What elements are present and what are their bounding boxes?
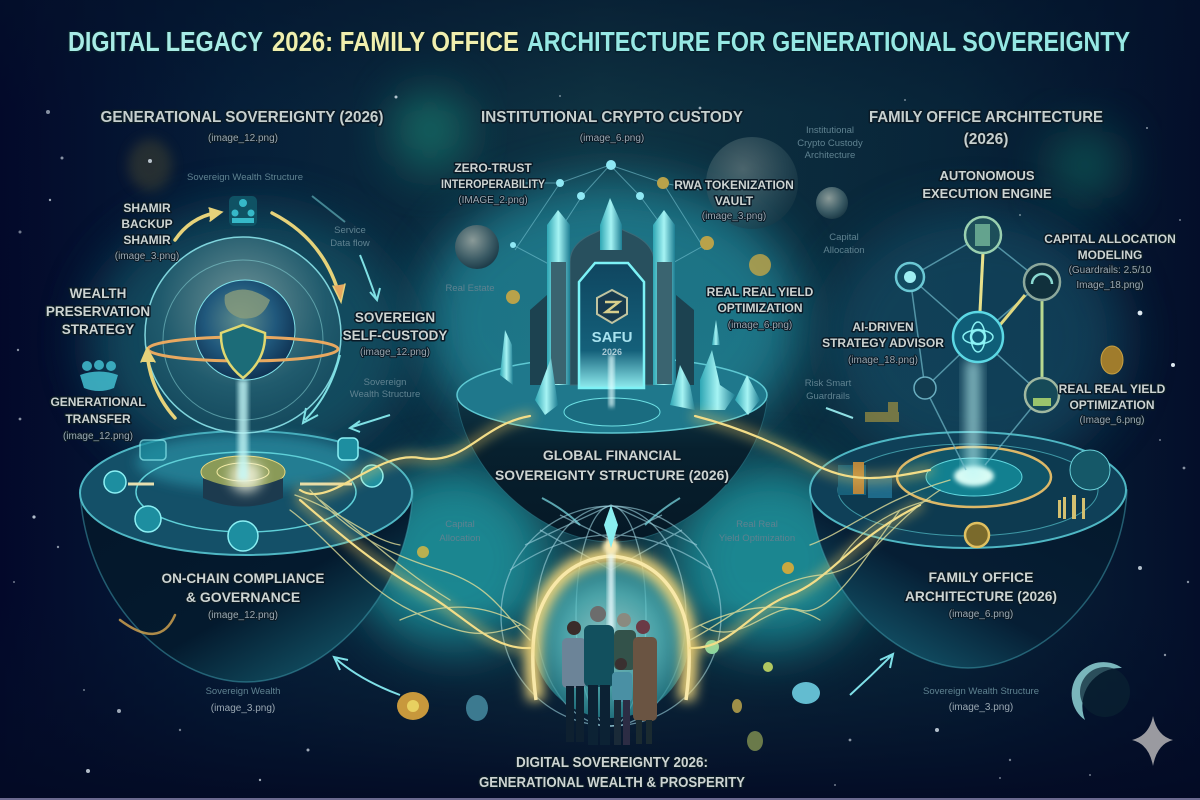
panel text: generational sovereignty: (image_3.png) xyxy=(115,251,179,262)
panel text: generational sovereignty: (image_12.png) xyxy=(63,431,133,442)
panel text: family office architecture: REAL REAL YIELD xyxy=(1059,382,1166,396)
orange orbit ring xyxy=(148,337,338,361)
panel text: family office architecture: MODELING xyxy=(1078,248,1142,262)
panel text: family office architecture: STRATEGY ADVISOR xyxy=(822,336,944,350)
panel text: family office architecture: (Image_6.png) xyxy=(1079,415,1145,426)
panel text: bowl captions: (image_6.png) xyxy=(949,609,1013,620)
panel text: generational sovereignty: Service xyxy=(334,225,366,236)
person: tall man xyxy=(584,606,614,745)
center bowl xyxy=(457,400,767,542)
floating flow arrows xyxy=(334,498,893,695)
disc charts and coin xyxy=(838,450,1110,547)
icon: gold yield badge xyxy=(1101,346,1123,374)
panel text: bowl captions: (image_12.png) xyxy=(208,610,278,621)
panel text: generational sovereignty: (image_12.png) xyxy=(208,133,278,144)
panel text: generational sovereignty: WEALTH xyxy=(70,286,126,301)
panel text: bowl captions xyxy=(162,569,1057,714)
panel text: institutional crypto custody: Institutional xyxy=(806,125,854,136)
icon: generational transfer people xyxy=(80,360,118,391)
panel text: family office architecture xyxy=(805,109,1176,426)
panel text: institutional crypto custody: Yield Optimization xyxy=(719,533,795,544)
right bowl xyxy=(810,490,1127,668)
panel text: generational sovereignty: SOVEREIGN xyxy=(355,310,435,325)
panel text: generational sovereignty xyxy=(46,109,447,442)
panel text: generational sovereignty: Sovereign xyxy=(364,377,406,388)
panel text: bowl captions: & GOVERNANCE xyxy=(186,589,300,605)
panel text: generational sovereignty: SHAMIR xyxy=(123,233,171,247)
panel text: institutional crypto custody: Architecture xyxy=(805,150,855,161)
panel text: institutional crypto custody: OPTIMIZATION xyxy=(717,301,803,315)
panel text: institutional crypto custody: Real Estate xyxy=(445,283,495,294)
gold token icons xyxy=(506,177,771,304)
risk bars and arrow xyxy=(826,402,899,422)
panel: right network, disc and bowl xyxy=(810,217,1127,668)
person: grey-haired elder xyxy=(614,613,636,670)
panel text: family office architecture: (Guardrails: 2.5/10 xyxy=(1069,265,1152,276)
panel text: institutional crypto custody: Crypto Custody xyxy=(797,138,863,149)
panel text: family office architecture: FAMILY OFFICE ARCHITECTURE xyxy=(869,109,1103,126)
panel: center vault platform xyxy=(457,160,771,542)
person: woman right xyxy=(633,620,657,744)
panel text: institutional crypto custody: VAULT xyxy=(715,194,754,208)
panel text: generational sovereignty: Data flow xyxy=(330,238,370,249)
panel text: generational sovereignty: SELF-CUSTODY xyxy=(343,328,447,343)
panel text: bowl captions: (image_3.png) xyxy=(949,702,1013,713)
panel text: institutional crypto custody: INSTITUTIONAL CRYPTO CUSTODY xyxy=(481,109,744,126)
panel text: institutional crypto custody: GLOBAL FINANCIAL xyxy=(543,447,682,463)
icon: shield xyxy=(221,325,265,378)
panel text: institutional crypto custody: REAL REAL YIELD xyxy=(707,285,814,299)
panel text: institutional crypto custody: Capital xyxy=(829,232,859,243)
panel text: generational sovereignty: Wealth Structure xyxy=(350,389,420,400)
panel text: generational sovereignty: STRATEGY xyxy=(62,322,134,337)
panel text: institutional crypto custody: ZERO-TRUST xyxy=(454,161,532,175)
panel text: generational sovereignty: PRESERVATION xyxy=(46,304,150,319)
panel text: institutional crypto custody: Capital xyxy=(445,519,475,530)
title: DIGITAL LEGACY xyxy=(68,26,263,57)
glass door xyxy=(579,263,644,388)
title: 2026: FAMILY OFFICE xyxy=(272,26,519,57)
panel text: institutional crypto custody: Allocation xyxy=(439,533,481,544)
panel text: institutional crypto custody xyxy=(439,109,865,544)
panel: left globe with shield xyxy=(80,196,390,480)
panel text: family office architecture: AI-DRIVEN xyxy=(852,320,914,334)
panel text: bowl captions: FAMILY OFFICE xyxy=(928,569,1034,585)
panel text: bowl captions: ON-CHAIN COMPLIANCE xyxy=(162,570,324,586)
panel text: generational sovereignty: (image_12.png) xyxy=(360,347,430,358)
panel text: institutional crypto custody: (IMAGE_2.png) xyxy=(458,195,528,206)
small crystal clusters xyxy=(500,320,760,415)
safu year: 2026 xyxy=(602,347,622,357)
bottom caption: DIGITAL SOVEREIGNTY 2026: xyxy=(516,754,708,771)
bottom caption xyxy=(479,754,745,791)
panel text: institutional crypto custody: SOVEREIGNTY STRUCTURE (2026) xyxy=(495,467,729,483)
panel text: generational sovereignty: BACKUP xyxy=(121,217,173,231)
cycle arrows xyxy=(141,208,345,418)
left bowl xyxy=(80,490,413,682)
panel text: family office architecture: OPTIMIZATION xyxy=(1069,398,1155,412)
panel text: family office architecture: EXECUTION ENGINE xyxy=(922,186,1052,201)
vertical beam xyxy=(238,380,248,480)
panel text: institutional crypto custody: RWA TOKENIZATION xyxy=(674,178,794,192)
floating coins xyxy=(397,546,820,751)
outer glass sphere xyxy=(145,237,341,433)
panel text: family office architecture: (image_18.png) xyxy=(848,355,918,366)
panel text: bowl captions: (image_3.png) xyxy=(211,703,275,714)
sharp layer xyxy=(300,416,930,648)
golden arch xyxy=(533,556,689,700)
icon: safu shield xyxy=(597,290,627,323)
panel text: institutional crypto custody: (image_6.png) xyxy=(728,320,792,331)
bottom caption: GENERATIONAL WEALTH & PROSPERITY xyxy=(479,774,745,791)
panel text: family office architecture: (2026) xyxy=(964,131,1008,148)
title xyxy=(68,26,1130,57)
icon: sovereign family top xyxy=(229,196,257,226)
network links xyxy=(910,235,1042,470)
panel text: bowl captions: Sovereign Wealth Structure xyxy=(923,686,1039,697)
vault gate xyxy=(530,198,694,407)
inner glow xyxy=(533,562,689,718)
panel text: generational sovereignty: Sovereign Wealth Structure xyxy=(187,172,303,183)
panel text: institutional crypto custody: (image_6.png) xyxy=(580,133,644,144)
panel text: bowl captions: ARCHITECTURE (2026) xyxy=(905,588,1057,604)
decorative planets xyxy=(455,137,1130,720)
person: older left xyxy=(562,621,586,742)
vertical beam xyxy=(966,360,980,480)
icon: four-point star watermark xyxy=(1132,716,1173,766)
panel text: generational sovereignty: SHAMIR xyxy=(123,201,171,215)
thin cyan flow arrows xyxy=(303,196,390,432)
constellation nodes xyxy=(510,160,708,248)
panel text: generational sovereignty: GENERATIONAL SOVEREIGNTY (2026) xyxy=(100,109,384,126)
right disc xyxy=(810,432,1126,548)
glow layer xyxy=(300,416,930,648)
platform ellipse xyxy=(457,357,767,433)
left disc xyxy=(80,431,412,555)
panel text: family office architecture: Risk Smart xyxy=(805,378,852,389)
energy streams: golden connecting lines xyxy=(120,416,950,648)
panel text: institutional crypto custody: (image_3.png) xyxy=(702,211,766,222)
family silhouettes xyxy=(562,606,657,745)
crystal towers xyxy=(547,210,570,385)
person: child xyxy=(612,658,632,745)
panel text: institutional crypto custody: Real Real xyxy=(736,519,778,530)
network nodes xyxy=(896,217,1060,412)
inner earth xyxy=(195,280,295,380)
safu label: SAFU xyxy=(592,329,632,346)
panel text: generational sovereignty: TRANSFER xyxy=(65,412,131,426)
panel text: institutional crypto custody: Allocation xyxy=(823,245,865,256)
constellation lines xyxy=(507,165,705,270)
panel text: generational sovereignty: GENERATIONAL xyxy=(50,395,146,409)
fine strands xyxy=(120,480,950,640)
panel text: family office architecture: Guardrails xyxy=(806,391,850,402)
panel text: bowl captions: Sovereign Wealth xyxy=(206,686,280,697)
panel text: institutional crypto custody: INTEROPERABILITY xyxy=(441,177,545,191)
geodesic sphere xyxy=(501,505,721,726)
panel: family under golden arch xyxy=(334,498,893,751)
panel: left floating bowl and orbital disc xyxy=(80,431,413,682)
panel text: family office architecture: CAPITAL ALLOCATION xyxy=(1044,232,1176,246)
panel text: family office architecture: Image_18.png) xyxy=(1076,280,1144,291)
panel text: family office architecture: AUTONOMOUS xyxy=(939,168,1035,183)
disc icon nodes xyxy=(104,438,383,551)
